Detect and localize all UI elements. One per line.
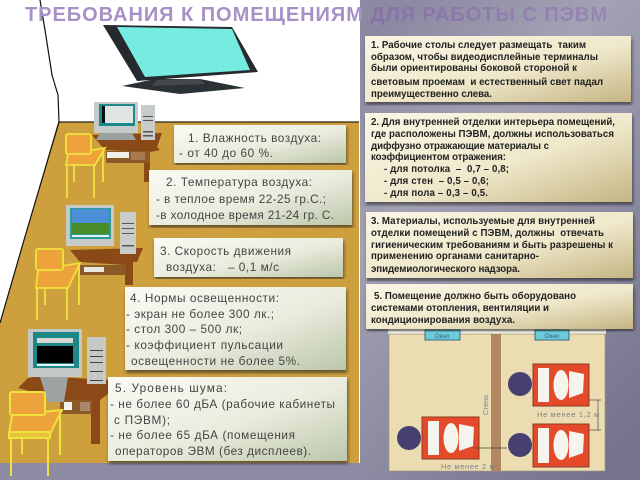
panel: lighting: 4. Нормы освещенности: bbox=[130, 291, 279, 305]
panel: rule 3: гигиеническим требованиям и быть разрешены к bbox=[371, 240, 613, 251]
panel: rule 2: - для стен – 0,5 – 0,6; bbox=[384, 176, 489, 187]
title: ТРЕБОВАНИЯ К ПОМЕЩЕНИЯМ ДЛЯ РАБОТЫ С ПЭВМ bbox=[25, 4, 607, 26]
panel: rule 1: преимущественно слева. bbox=[371, 89, 492, 100]
panel: rule 1: были ориентированы боковой стороной к bbox=[371, 63, 577, 74]
panel: rule 2: - для потолка – 0,7 – 0,8; bbox=[384, 164, 509, 175]
workstation 2 bbox=[66, 205, 143, 285]
panel: rule 1: световым проемам и естественный свет падал bbox=[371, 77, 603, 88]
panel: temperature: - в теплое время 22-25 гр.С.; bbox=[156, 192, 326, 206]
dimension labels: Не менее 2 м bbox=[441, 462, 495, 471]
panel: lighting bbox=[125, 287, 346, 370]
wall outline bbox=[0, 0, 59, 323]
desk B bbox=[508, 364, 589, 406]
panel: rule 2: диффузно отражающие материалы с bbox=[371, 141, 550, 152]
panel: rule 2 bbox=[365, 113, 632, 202]
plan top band bbox=[388, 329, 606, 334]
background: right panel bbox=[360, 0, 640, 480]
panel: temperature: 2. Температура воздуха: bbox=[166, 175, 312, 189]
panel: lighting: - коэффициент пульсации bbox=[126, 338, 283, 352]
panel: lighting: освещенности не более 5%. bbox=[131, 354, 300, 368]
panel: rule 2: 2. Для внутренней отделки интерьера помещений, bbox=[371, 117, 615, 128]
wall bbox=[491, 334, 501, 471]
dimension arrows bbox=[474, 400, 601, 448]
floor bbox=[0, 122, 359, 463]
panel: rule 2: где расположены ПЭВМ, должны использоваться bbox=[371, 129, 614, 140]
panel: lighting: - стол 300 – 500 лк; bbox=[126, 322, 242, 336]
workstation 3 bbox=[18, 329, 108, 444]
panel: rule 2: коэффициентом отражения: bbox=[371, 152, 506, 163]
icon: chair 2 bbox=[36, 249, 80, 320]
panel: noise: операторов ЭВМ (без дисплеев). bbox=[115, 444, 311, 458]
panel: air speed bbox=[154, 238, 343, 277]
panel: air speed: 3. Скорость движения bbox=[160, 244, 291, 258]
panel: temperature: -в холодное время 21-24 гр. С. bbox=[156, 208, 334, 222]
panel: noise: с ПЭВМ); bbox=[114, 413, 170, 427]
panel: noise: 5. Уровень шума: bbox=[115, 381, 227, 395]
window labels bbox=[425, 330, 569, 340]
panel: noise bbox=[108, 377, 347, 461]
panel: rule 2: - для пола – 0,3 – 0,5. bbox=[384, 188, 488, 199]
background: bottom strip bbox=[0, 463, 360, 480]
panel: humidity: 1. Влажность воздуха: bbox=[188, 131, 321, 145]
panel: rule 3: 3. Материалы, используемые для внутренней bbox=[371, 216, 595, 227]
icon: chair 3 bbox=[9, 392, 62, 476]
dimension labels: Не менее 1,2 м bbox=[537, 410, 600, 419]
panel: air speed: воздуха: – 0,1 м/с bbox=[166, 260, 279, 274]
panel: rule 1 bbox=[365, 36, 631, 102]
panel: rule 3: эпидемиологического надзора. bbox=[371, 264, 520, 275]
panel: rule 5 bbox=[366, 284, 633, 329]
panel: rule 5: кондиционирования воздуха. bbox=[371, 315, 515, 326]
plan sheet bbox=[389, 334, 605, 471]
panel: rule 5: 5. Помещение должно быть оборудовано bbox=[374, 291, 576, 302]
desk A bbox=[397, 417, 479, 459]
panel: rule 3: применению органами санитарно- bbox=[371, 251, 539, 262]
desk C bbox=[508, 424, 589, 467]
icon: large monitor bbox=[103, 25, 258, 94]
panel: temperature bbox=[149, 170, 352, 225]
panel: noise: - не более 65 дБА (помещения bbox=[110, 428, 295, 442]
panel: rule 1: 1. Рабочие столы следует размещать таким bbox=[371, 40, 586, 51]
panel: lighting: - экран не более 300 лк.; bbox=[126, 307, 274, 321]
icon: chair 1 bbox=[66, 134, 105, 198]
panel: rule 5: системами отопления, вентиляции и bbox=[371, 303, 549, 314]
floor plan diagram bbox=[388, 329, 606, 471]
window labels: Окно bbox=[434, 333, 450, 340]
panel: noise: - не более 60 дБА (рабочие кабинеты bbox=[110, 397, 335, 411]
panel: humidity bbox=[174, 125, 346, 163]
window labels: Окно bbox=[544, 333, 560, 340]
workstation 1 bbox=[92, 102, 162, 182]
floor back edge bbox=[58, 121, 359, 123]
panel: rule 3: отделки помещений с ПЭВМ, должны отвечать bbox=[371, 228, 604, 239]
panel: humidity: - от 40 до 60 %. bbox=[179, 146, 273, 160]
dimension labels: Стена bbox=[483, 395, 490, 415]
panel: rule 1: образом, чтобы видеодисплейные терминалы bbox=[371, 52, 598, 63]
panel: rule 3 bbox=[366, 212, 633, 278]
dimension labels bbox=[441, 395, 600, 471]
